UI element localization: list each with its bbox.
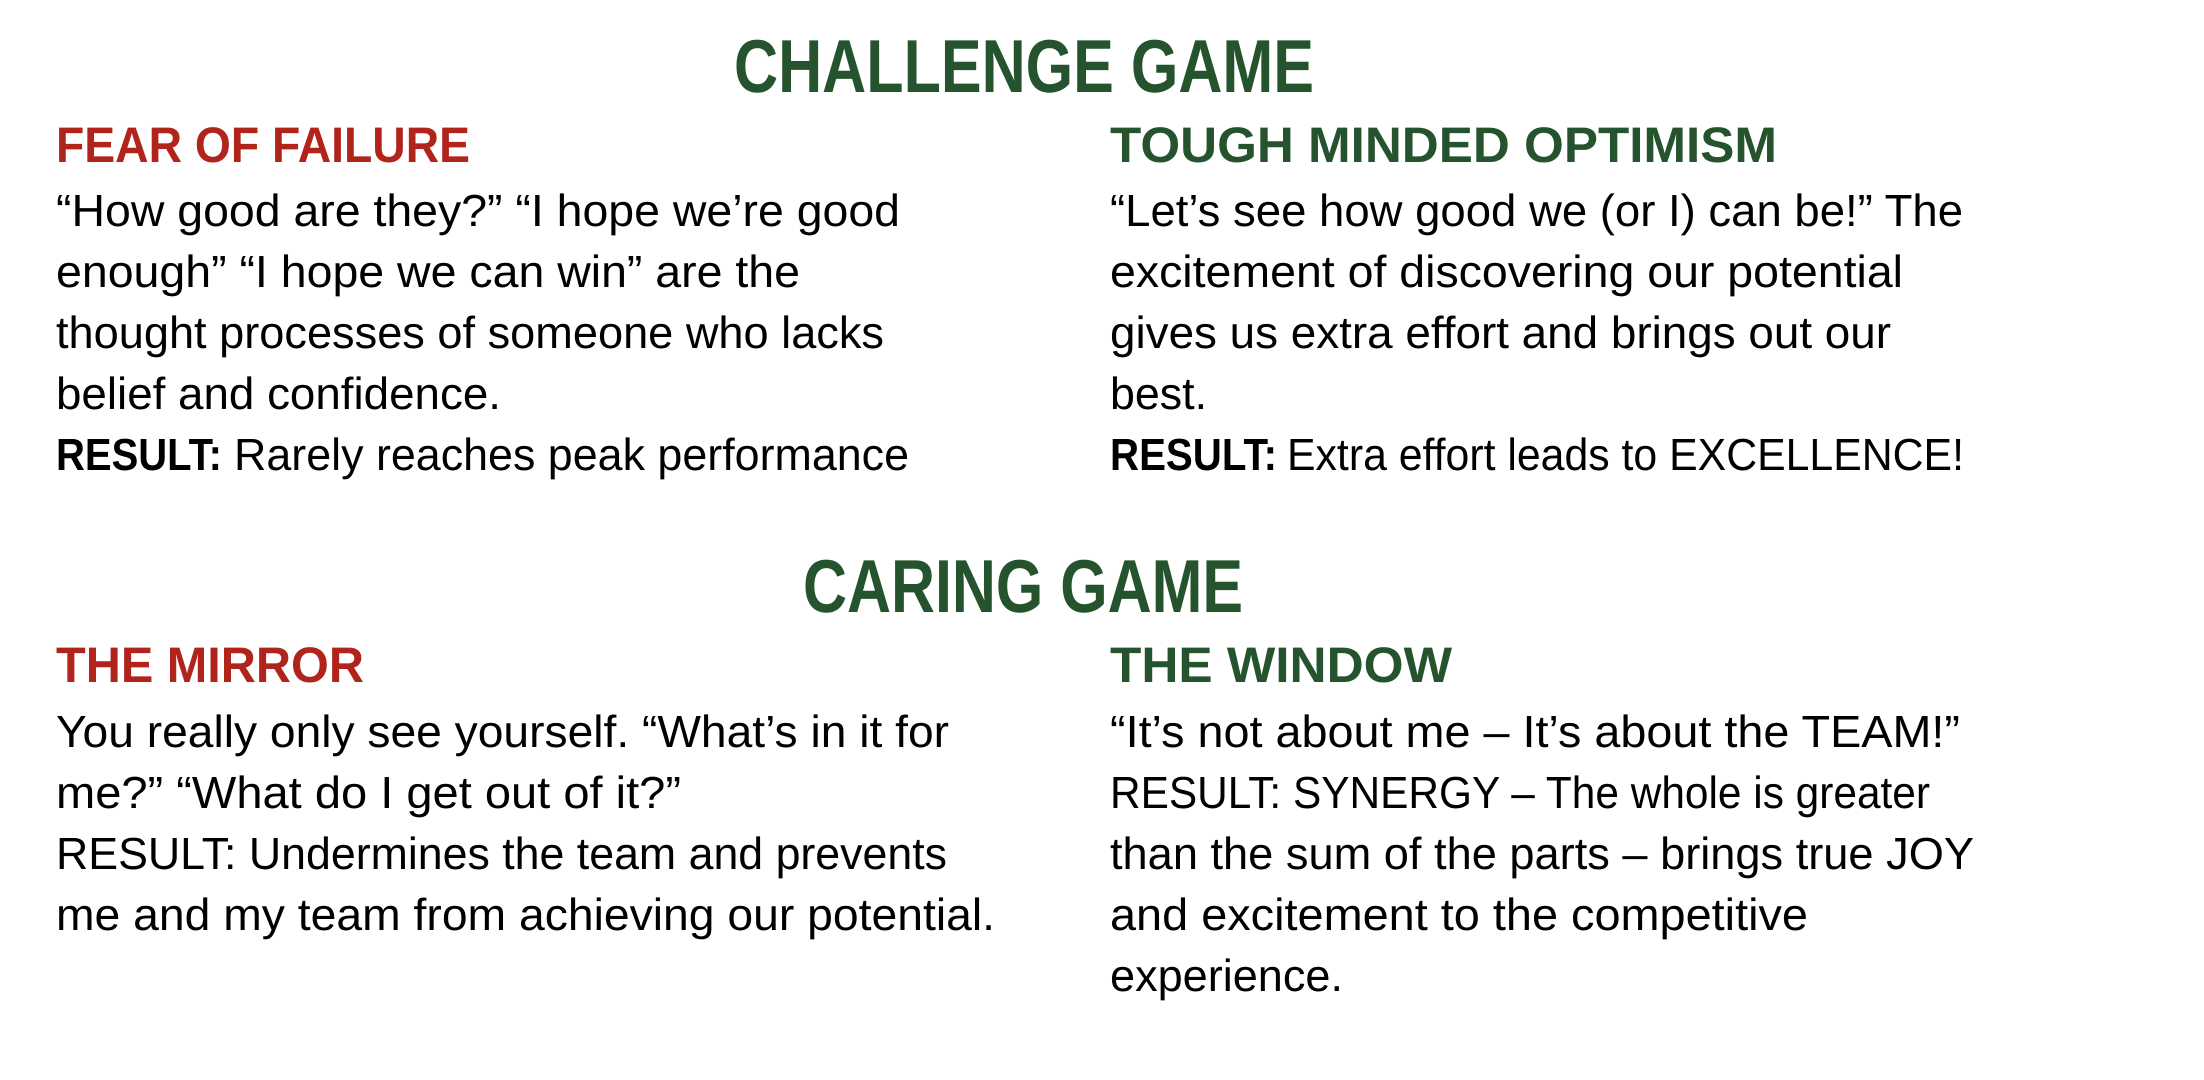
text block: fear of failure description: “How good are they?” “I hope we’re good: [56, 185, 900, 236]
text block: the window description: [1110, 706, 1974, 1001]
heading: fear of failure: FEAR OF FAILURE: [56, 117, 470, 173]
title: caring game: CARING GAME: [803, 544, 1243, 628]
panel: fear of failure: [56, 117, 909, 480]
result: tough minded optimism: RESULT:: [1110, 429, 1277, 480]
heading: tough minded optimism: TOUGH MINDED OPTIMISM: [1110, 117, 1777, 173]
heading: the window: THE WINDOW: [1110, 637, 1453, 693]
panel: tough minded optimism: [1110, 117, 1964, 480]
text block: tough minded optimism description: [1110, 185, 1963, 419]
text block: the window description: RESULT: SYNERGY – The whole is greater: [1110, 767, 1930, 818]
title: challenge game: CHALLENGE GAME: [734, 24, 1314, 108]
text block: fear of failure description: [56, 185, 900, 419]
text block: the mirror description: me and my team from achieving our potential.: [56, 889, 995, 940]
text block: the mirror description: You really only see yourself. “What’s in it for: [56, 706, 949, 757]
text block: the mirror description: RESULT: Undermines the team and prevents: [56, 828, 947, 879]
text block: the window description: “It’s not about me – It’s about the TEAM!”: [1110, 706, 1960, 757]
text block: tough minded optimism description: excitement of discovering our potential: [1110, 246, 1903, 297]
heading: the mirror: THE MIRROR: [56, 637, 364, 693]
text block: the mirror description: [56, 706, 995, 940]
result: fear of failure: RESULT:: [56, 429, 222, 480]
text block: the window description: experience.: [1110, 950, 1343, 1001]
text block: fear of failure description: belief and confidence.: [56, 368, 501, 419]
result: tough minded optimism: Extra effort leads to EXCELLENCE!: [1287, 429, 1964, 480]
panel: the mirror: [56, 637, 995, 940]
text block: the window description: and excitement to the competitive: [1110, 889, 1808, 940]
text block: the mirror description: me?” “What do I get out of it?”: [56, 767, 681, 818]
text block: fear of failure description: enough” “I hope we can win” are the: [56, 246, 800, 297]
text block: fear of failure description: thought processes of someone who lacks: [56, 307, 884, 358]
text block: tough minded optimism description: “Let’s see how good we (or I) can be!” The: [1110, 185, 1963, 236]
text block: tough minded optimism description: best.: [1110, 368, 1207, 419]
text block: tough minded optimism description: gives us extra effort and brings out our: [1110, 307, 1891, 358]
text block: the window description: than the sum of the parts – brings true JOY: [1110, 828, 1974, 879]
panel: the window: [1110, 637, 1974, 1001]
result: fear of failure: Rarely reaches peak performance: [234, 429, 909, 480]
